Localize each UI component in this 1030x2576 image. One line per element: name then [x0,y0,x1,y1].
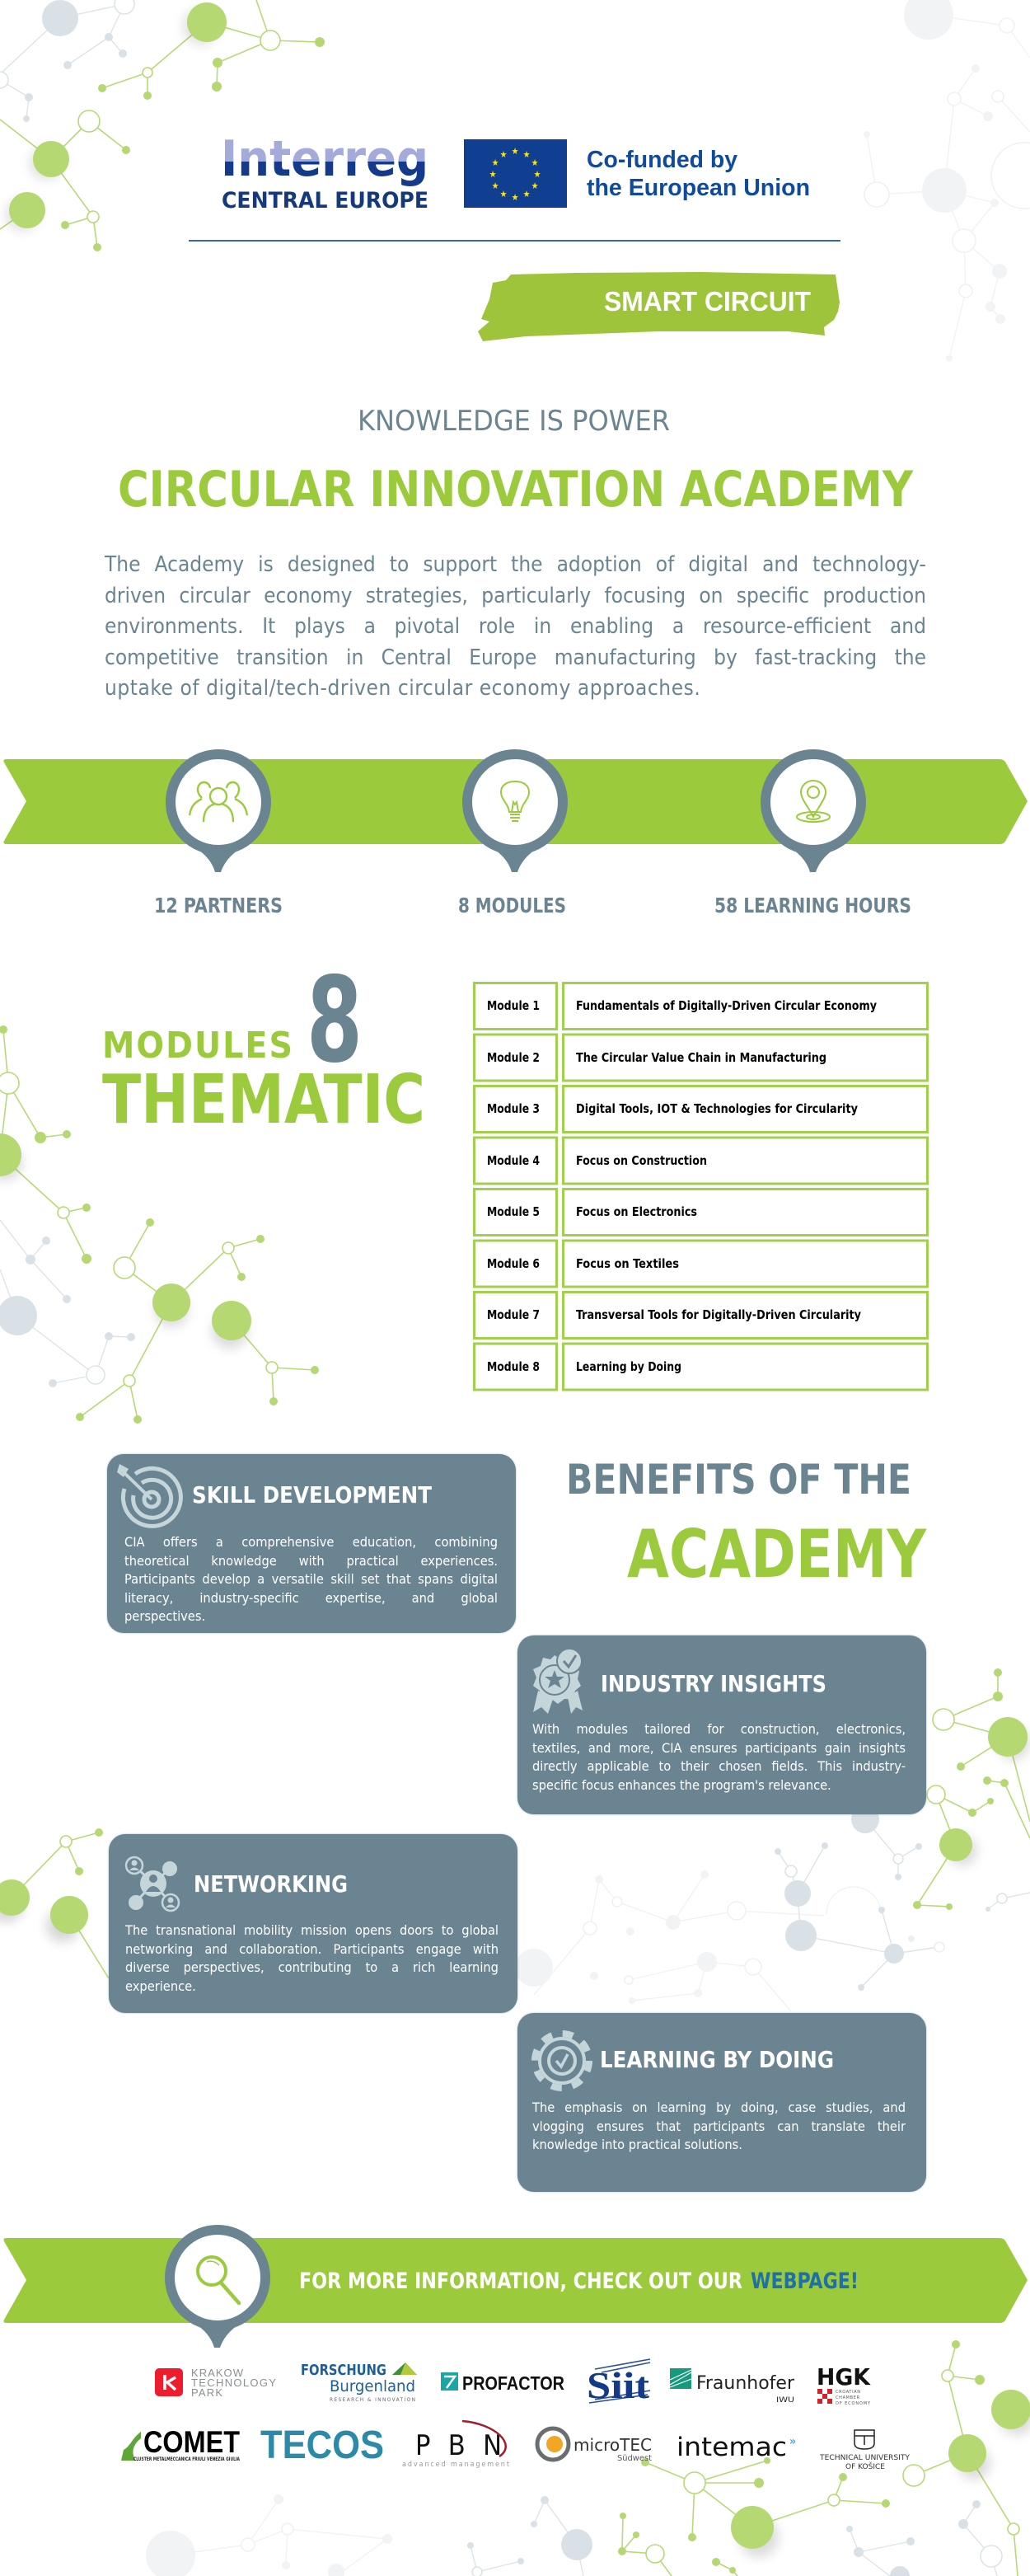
brush label: Smart Circuit: SMART CIRCUIT [604,286,811,317]
logo: PBN advanced management: PBN [415,2429,502,2462]
body text: The transnational mobility mission opens doors to global [125,1922,499,1938]
intro paragraph: driven circular economy strategies, particularly focusing on specific production [105,584,926,608]
logo: PBN advanced management: advanced management [402,2461,509,2469]
network: centre right gray [515,1805,1030,2011]
body text [532,1721,906,1793]
logo: Interreg Central Europe [221,130,428,213]
module row 1: Fundamentals of Digitally-Driven Circular Economy [576,998,877,1013]
logo: EU flag: ★ [523,189,531,199]
logo: Tecos: TECOS [260,2424,384,2467]
network: top right [864,0,1030,362]
logo: Interreg Central Europe: CENTRAL EUROPE [222,188,428,213]
body text [125,1922,499,1994]
logo: PBN advanced management [402,2421,509,2469]
logo: EU flag: ★ [512,146,519,157]
body text: networking and collaboration. Participants engage with [125,1941,499,1957]
logo: HGK Croatian Chamber of Economy: HGK [817,2363,872,2391]
module row 8: Module 8 [487,1359,540,1374]
logo: HGK Croatian Chamber of Economy: OF ECONOMY [836,2401,871,2406]
logo: EU flag [464,139,567,208]
icon: light bulb [501,781,529,821]
icon: people network [125,1856,180,1912]
module table [475,983,928,1390]
body text: literacy, industry-specific expertise, and global [124,1590,498,1606]
logo: EU flag: ★ [492,157,499,168]
module row 4: Module 4 [487,1153,540,1168]
logo: Intemac: intemac [677,2433,787,2462]
body text [532,2100,906,2152]
logo: Forschung Burgenland: FORSCHUNG [301,2362,386,2379]
text: Co-funded by the European Union: the European Union [587,175,810,201]
module row 3: Digital Tools, IOT & Technologies for Circularity [576,1101,858,1116]
logo: Comet [121,2425,241,2462]
logo: EU flag: ★ [531,157,539,168]
module row 6: Focus on Textiles [576,1256,679,1271]
logo: Profactor: PROFACTOR [462,2372,564,2394]
logo: HGK Croatian Chamber of Economy [817,2363,872,2406]
heading: LEARNING BY DOING [600,2046,834,2073]
icon: gear with check [531,2030,592,2091]
green arrow banner [3,759,1028,844]
intro paragraph: uptake of digital/tech-driven circular economy approaches. [105,676,700,701]
network: left of networking card [0,1828,109,1978]
logo: microTEC Sudwest [537,2428,653,2463]
icon: award badge [533,1649,583,1714]
call to action: WEBPAGE! [751,2269,859,2294]
module row 3: Module 3 [487,1101,540,1116]
logo: microTEC Sudwest: microTEC [574,2435,652,2455]
logo: EU flag: ★ [500,189,508,199]
header divider [189,240,840,242]
heading: benefits of the academy: ACADEMY [627,1516,927,1593]
module row 5: Focus on Electronics [576,1204,697,1219]
body text: specific focus enhances the program's relevance. [532,1777,831,1793]
logo: HGK Croatian Chamber of Economy: CROATIAN [836,2390,860,2395]
card: industry insights [517,1635,926,1814]
body text: textiles, and more, CIA ensures participants gain insights [532,1740,906,1756]
logo: Comet: COMET [143,2425,240,2459]
module row 8: Learning by Doing [576,1359,681,1374]
body text: Participants develop a versatile skill set that spans digital [124,1571,498,1587]
heading: benefits of the academy [566,1456,927,1593]
heading: INDUSTRY INSIGHTS [601,1670,826,1697]
module row 1 [475,983,928,1029]
call to action: FOR MORE INFORMATION, CHECK OUT OUR [299,2269,742,2294]
network: top left [0,0,325,251]
stat labels [154,894,911,917]
intro paragraph: environments. It plays a pivotal role in enabling a resource-efficient and [105,614,926,639]
module row 1: Module 1 [487,998,540,1013]
stat labels: 8 MODULES [458,894,566,917]
stat labels: 58 LEARNING HOURS [714,894,911,917]
module row 2: Module 2 [487,1050,540,1065]
logo: EU flag: ★ [523,149,531,160]
brush label: Smart Circuit [478,272,840,341]
logo: Siit: Siit [587,2364,650,2406]
pin: learning hours [765,754,861,872]
heading: 8 modules thematic: MODULES [102,1025,293,1067]
logo: EU flag: ★ [489,169,497,180]
logo: HGK Croatian Chamber of Economy: CHAMBER [836,2395,860,2400]
pin: modules [467,754,563,872]
logo: Forschung Burgenland: Burgenland [330,2377,415,2395]
module row 6: Module 6 [487,1256,540,1271]
body text [124,1534,498,1624]
logo: Krakow Technology Park: TECHNOLOGY [191,2377,276,2389]
module row 6 [475,1241,928,1287]
logo: EU flag: ★ [512,192,519,203]
body text: knowledge into practical solutions. [532,2137,742,2152]
logo: Intemac: » [789,2435,796,2448]
heading: SKILL DEVELOPMENT [192,1481,433,1509]
module row 4: Focus on Construction [576,1153,707,1168]
body text: CIA offers a comprehensive education, combining [124,1534,498,1550]
heading: 8 modules thematic: 8 [307,951,363,1089]
icon: location marker [797,781,830,822]
logo: Interreg Central Europe: Interreg [221,130,428,188]
icon: magnifying glass [198,2257,239,2303]
heading: NETWORKING [194,1870,348,1898]
logo: Technical University of Kosice: TECHNICAL UNIVERSITY [819,2454,910,2462]
module row 2 [475,1035,928,1081]
network: bottom [146,2340,1030,2576]
logo: Technical University of Kosice: OF KOŠICE [845,2461,885,2471]
icon: target with arrow [117,1464,183,1528]
intro paragraph: competitive transition in Central Europe manufacturing by fast-tracking the [105,645,926,669]
logo: EU flag: ★ [534,169,541,180]
module row 2: The Circular Value Chain in Manufacturing [576,1050,826,1065]
intro paragraph: The Academy is designed to support the adoption of digital and technology- [105,552,926,577]
body text: vlogging ensures that participants can translate their [532,2119,906,2134]
body text: theoretical knowledge with practical experiences. [124,1553,498,1569]
logo: EU flag: ★ [492,181,499,191]
text: Co-funded by the European Union [587,147,810,201]
network: right of industry insights [913,1668,1030,1910]
stat labels: 12 PARTNERS [154,894,283,917]
logo: microTEC Sudwest: Südwest [617,2454,653,2463]
network: left of modules [0,1025,319,1424]
logo: EU flag: ★ [500,149,508,160]
logo: EU flag: ★ [531,181,539,191]
logo: Forschung Burgenland [301,2362,417,2403]
logo: Krakow Technology Park: KRAKOW [191,2367,244,2379]
pin: partners [171,754,266,872]
logo: Krakow Technology Park [155,2367,276,2399]
module row 7: Module 7 [487,1307,540,1322]
heading: 8 modules thematic: THEMATIC [102,1061,425,1139]
module row 7 [475,1293,928,1339]
heading: benefits of the academy: BENEFITS OF THE [566,1456,911,1504]
text: Co-funded by the European Union: Co-funded by [587,147,737,173]
icon: people [190,782,247,822]
body text: perspectives. [124,1608,205,1624]
subheading: KNOWLEDGE IS POWER [358,405,670,438]
logo: Fraunhofer IWU: IWU [776,2396,794,2405]
heading: 8 modules thematic [102,951,425,1139]
card: learning by doing [517,2013,926,2192]
body text: diverse perspectives, contributing to a rich learning [125,1959,499,1975]
body text: The emphasis on learning by doing, case studies, and [532,2100,906,2115]
module row 7: Transversal Tools for Digitally-Driven Circularity [576,1307,861,1322]
logo: Comet: CLUSTER METALMECCANICA FRIULI VENEZIA GIULIA [133,2456,241,2462]
pin: magnifier [170,2230,265,2348]
logo: Fraunhofer IWU [670,2368,795,2405]
intro paragraph [104,552,926,701]
module row 5 [475,1189,928,1235]
card: networking [109,1834,517,2013]
body text: With modules tailored for construction, electronics, [532,1721,906,1737]
module row 4 [475,1138,928,1184]
module row 8 [475,1344,928,1390]
module row 5: Module 5 [487,1204,540,1219]
body text: directly applicable to their chosen fields. This industry- [532,1758,906,1774]
logo: Krakow Technology Park: PARK [191,2386,222,2399]
logo: Fraunhofer IWU: Fraunhofer [696,2373,795,2394]
bottom green arrow banner [3,2238,1028,2323]
logo: Technical University of Kosice [819,2430,910,2471]
card: skill development [107,1454,516,1633]
module row 3 [475,1086,928,1133]
logo: Forschung Burgenland: RESEARCH & INNOVATION [330,2396,415,2403]
main title: CIRCULAR INNOVATION ACADEMY [118,461,914,518]
body text: experience. [125,1978,196,1994]
